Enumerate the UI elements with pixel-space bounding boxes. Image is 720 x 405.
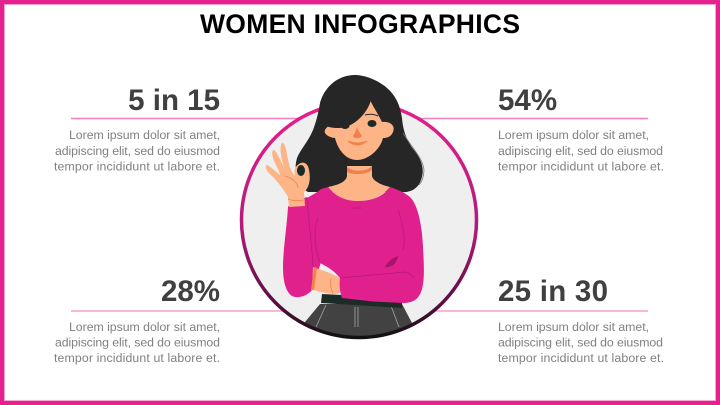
stat: bottom right: Lorem ipsum dolor sit amet, [498, 320, 649, 334]
hair [296, 75, 423, 192]
stat: top left: adipiscing elit, sed do eiusmod [55, 144, 220, 158]
stat: bottom left [54, 275, 220, 365]
stat: bottom left: 28% [161, 275, 220, 308]
stat: top left: tempor incididunt ut labore et. [54, 160, 220, 174]
stat: bottom right: adipiscing elit, sed do eiusmod [498, 336, 663, 350]
sweater [307, 187, 424, 303]
title: WOMEN INFOGRAPHICS [200, 9, 520, 39]
stat: top left: Lorem ipsum dolor sit amet, [69, 128, 220, 142]
raised hand [266, 143, 310, 207]
forearm and hand [312, 267, 340, 294]
stat: bottom left: tempor incididunt ut labore et. [54, 351, 220, 365]
stat: bottom right [498, 275, 664, 365]
stat: bottom left: Lorem ipsum dolor sit amet, [69, 320, 220, 334]
stat: bottom right: tempor incididunt ut labore et. [498, 351, 664, 365]
stat: top right: tempor incididunt ut labore et. [498, 160, 664, 174]
stat: top right: Lorem ipsum dolor sit amet, [498, 128, 649, 142]
face [325, 100, 394, 160]
waistband [321, 294, 402, 308]
stat: top left [54, 84, 220, 174]
circle backdrop [242, 102, 476, 345]
left arm sleeve [283, 197, 325, 297]
stat: top right [498, 84, 664, 174]
stat: bottom left: adipiscing elit, sed do eiusmod [55, 336, 220, 350]
fringe [323, 85, 372, 128]
stat: top right: adipiscing elit, sed do eiusmod [498, 144, 663, 158]
neck [328, 166, 390, 201]
stat: bottom right: 25 in 30 [498, 275, 608, 308]
eyes and nose [340, 114, 378, 145]
stat: top left: 5 in 15 [128, 84, 220, 117]
connector lines [71, 118, 648, 311]
stat: top right: 54% [498, 84, 557, 117]
woman illustration [266, 75, 424, 308]
